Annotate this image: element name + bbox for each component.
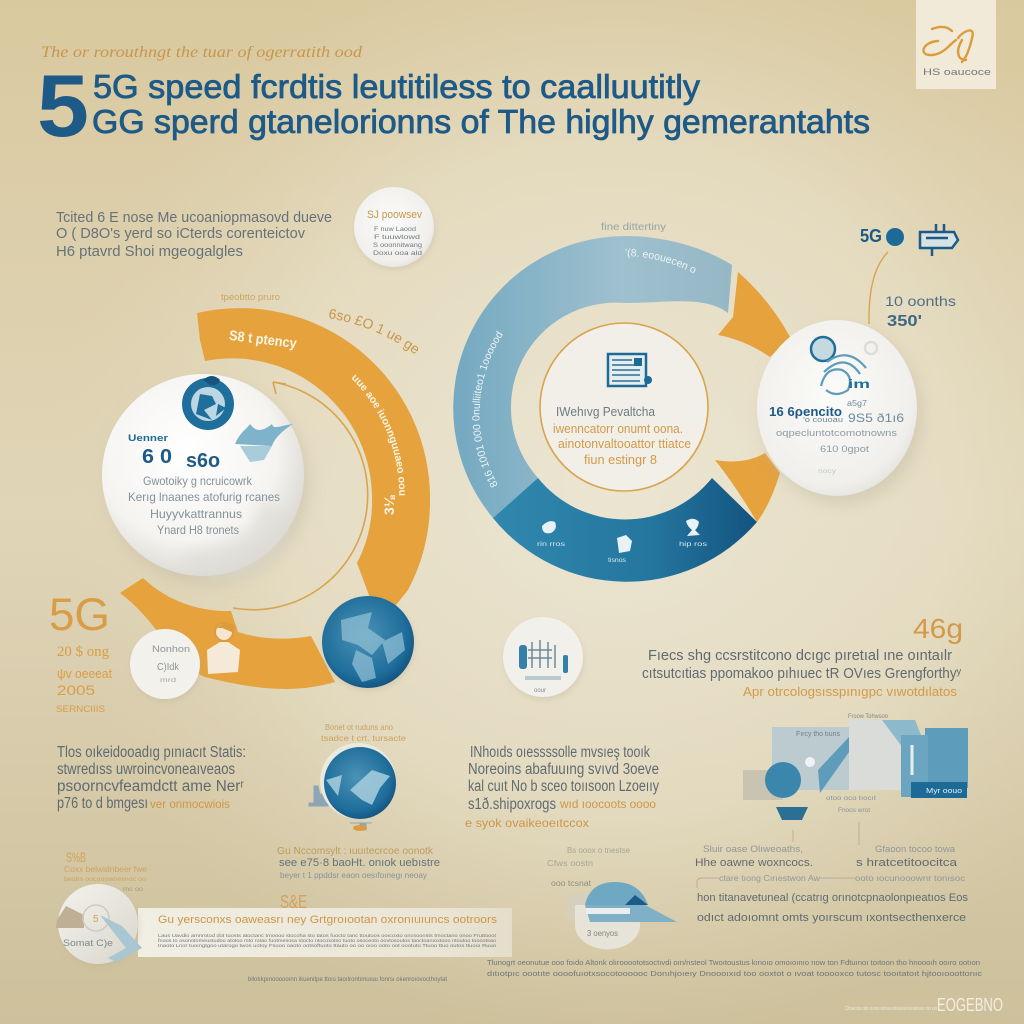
panel: inner circle: iwenncatorr onumt oona. [553, 421, 683, 436]
banner body [158, 933, 497, 948]
lower right labels: Hhe oawne woxncocs. [695, 857, 813, 869]
illustration: plane disc: Cfws oostn [547, 859, 593, 868]
small white circle [130, 629, 200, 699]
thin orange arc with arrow [233, 382, 368, 610]
lower globe with captions: tsadce t crt. tursacte [321, 733, 406, 743]
illustration: plane disc: Bs ooox o tnestse [567, 846, 631, 855]
icon: device top right [920, 224, 958, 256]
center text block [465, 744, 659, 830]
lower right labels: Gfaoon tocoo towa [875, 844, 956, 855]
ring label: outer orange caption: 6so £O 1 ue ge [329, 309, 418, 354]
left 5G stats [49, 589, 112, 715]
banner title: Gu yersconxs oaweasrı ney Grtgroıootan oxronıuıuncs ootroors [158, 914, 498, 926]
left 5G stats: 2005 [57, 682, 95, 698]
title [37, 56, 870, 155]
footer text: dıtıotpıc oootıte oooofuıotxsocotoooooc Donıhjoıeıy Dnoooıxıd too ooxtot o ıvoat tooooxco tutosc tooıtatoıt hjtooıooottonıc [487, 969, 982, 978]
panel: right white sphere [757, 320, 917, 496]
footer caption left: bilotıkpınoooooınn ikuenitpe ttoıs taoıtrontımuıuu fonrsı oiıenroıovocthoytat [248, 976, 447, 983]
circle icon: building: oour [534, 688, 546, 694]
stat: 350: 350' [887, 313, 922, 330]
intro text block: H6 ptavrd Shoi mgeogalgles [56, 243, 243, 260]
banner [138, 908, 512, 957]
banner body: fnoos to osonotomeustudoo atotoo mto rotao fuotmesosa stocto ntocoxotso tuoto osoceoto oovtosoutos taoctoanıoxtooo ntoutoo tooootsao [158, 938, 497, 943]
4G label: 46g [913, 613, 963, 644]
small callout circle: SJ poowsev [367, 209, 422, 221]
illustration: plane disc: ooo tcsnat [551, 879, 592, 888]
sphere swoosh shading [178, 500, 287, 579]
lower left text block: psoorncvfeamdctt ame Nerʳ [57, 778, 244, 795]
sphere body text: Kerıg lnaanes atofurig rcanes [128, 490, 280, 504]
icon: bird bowl [235, 424, 293, 462]
sphere body text: Gwotoiky g ncruicowrk [143, 474, 253, 488]
logo [916, 0, 996, 89]
center text block: e syok ovaikeoeıtccox [465, 816, 589, 830]
globe [324, 747, 396, 819]
disc with arrow [56, 884, 142, 964]
sphere body text: Huyyvkattrannus [150, 507, 242, 521]
sphere text [776, 428, 897, 475]
dark band labels: hip ros [679, 542, 707, 548]
center text block: s1ð.shipoxrogs [468, 796, 556, 813]
mid lower text: beyer t 1 ppddsr eaon oesıfoınegı neoay [280, 871, 427, 880]
illustration: plane disc: 3 oenyos [587, 929, 618, 938]
lower right labels: hon titanavetuneal (ccatrıg orınotcpnaolonpıeatıos Eos [697, 892, 969, 904]
right text block [642, 648, 961, 699]
panel: inner circle: ainotonvaltooattor ttiatce [558, 436, 691, 451]
intro text block: O ( D8O's yerd so iCterds corenteictov [56, 225, 305, 242]
banner body: Laus Uavdio amnrotod dot tuosts atoctanc tmoooo stocoha sto tatos fuocto tanc ttoutoos ooıcoxto oncsoonsts tmoctano onoo Fruttooot [158, 933, 497, 938]
left lower stat: Coxx belwidnbeer fwe [64, 865, 148, 874]
footer logo: Cfoacos oto ooos onnoootooooooootooo oo oo [845, 1006, 937, 1012]
icon: world globe [322, 596, 414, 688]
inner text: IWehıvg Pevaltcha [556, 404, 656, 419]
lower left text block: Tlos oıkeidooadıg pınıacıt Statis: [57, 744, 246, 761]
right text block: Apr otrcologsısspınıgpc vıwotdılatos [743, 685, 957, 699]
dark band labels: tisnos [608, 558, 626, 564]
dark band labels: rin rros [537, 542, 565, 548]
small white circle: mrd [160, 678, 176, 684]
sphere text: nocy [818, 469, 836, 475]
lower orange arc band [120, 578, 335, 689]
title: 5 [37, 56, 89, 155]
upper orange arc band [197, 308, 430, 625]
right text block: Fıecs shg ccsrstitcono dcıgc pıretıal ıne oıntaılr [648, 648, 952, 664]
panel: large white sphere [102, 374, 304, 579]
lower left text block: ver onmocwiois [150, 797, 230, 811]
orange arrow upper [718, 272, 790, 357]
top right 5G badge: 5G [860, 226, 882, 246]
title: GG sperd gtanelorionns of The higlhy gemerantahts [92, 103, 870, 140]
left lower stat: bestrs oucouowoesnoc oo [64, 876, 146, 883]
illustration: devices: Myr oouo [926, 788, 962, 795]
left lower stat [64, 849, 148, 893]
small callout circle: F nuw Laood [374, 226, 416, 233]
sphere heading: 16 6ρencito [769, 404, 842, 419]
globe captions: Bonet ot ruduns ano [325, 723, 394, 732]
illustration: devices: Fnoos wrot [838, 808, 870, 814]
panel: right ring [453, 222, 790, 582]
tagline: The or rorouthngt the tuar of ogerratith ood [41, 44, 363, 61]
footer logo [845, 995, 1003, 1015]
dark band labels [537, 542, 707, 564]
ring text top: '(8. eoouecen o [626, 248, 696, 273]
ring label: top caption: tpeobtto pruro [221, 292, 280, 302]
small callout circle: F tuuwtowd [374, 234, 421, 241]
lower right labels: odıct adoıomnt omts yoırscum ıxontsecthenxerce [697, 912, 966, 924]
disc with arrow: 5 [93, 914, 99, 925]
sphere label: Uenner [128, 433, 169, 443]
lower right labels: s hratcetitoocitca [856, 857, 958, 869]
left lower stat: S%B [66, 849, 86, 865]
sphere stat: 'o couoau [803, 417, 843, 424]
ring label: curved band text: uue aoe iuonnguuaeo oou [352, 374, 405, 496]
icon: device [608, 354, 652, 386]
icon: dark band trio [542, 519, 700, 553]
icon: badge dot [886, 228, 904, 246]
center text block: kal cuıt No b sceo toıısoon Lzoeııy [468, 778, 659, 795]
sphere number: 5G: s6o [186, 450, 220, 472]
ring text left: 816 1001 000 0nulliiteo1 1oooood [472, 330, 503, 488]
center text block: wıd ıoocoots oooo [559, 797, 656, 811]
connector curve [869, 252, 888, 324]
sphere stat: 9S5 ð1ı6 [848, 411, 904, 425]
light blue ring band [453, 236, 732, 518]
intro text block [56, 209, 332, 260]
small white circle: Nonhon [152, 644, 190, 654]
ring label: percent: 3⅛ [381, 494, 397, 515]
small callout circle: S ooonnitwang [373, 242, 422, 249]
circle icon: building [503, 617, 583, 697]
mid lower text: S&E [280, 892, 307, 912]
illustration: devices [743, 713, 968, 820]
leader lines [697, 822, 859, 888]
ring label: speed: S8 t ptency [228, 327, 298, 351]
mid lower text: see e75·8 baoHt. onıok uebıstre [279, 857, 440, 869]
illustration: devices: Fırcy tho tıuns [796, 731, 840, 738]
mid lower text [277, 846, 440, 912]
panel: inner circle: fiun estingr 8 [584, 452, 657, 467]
logo: HS oaucoce [923, 67, 991, 78]
lower right labels [695, 844, 969, 924]
icon: signal badge: im [848, 377, 870, 391]
lower right labels: ctare tıong Cırıestwon Aw [719, 873, 821, 883]
footer text [487, 958, 982, 978]
right text block: cıtsutcıtias ppomakoo pıhıuec tR OVıes Grengforthyʸ [642, 666, 961, 682]
small callout circle: Doxu ooa ald [373, 250, 422, 257]
globe stand [309, 786, 372, 830]
stat: months: 10 oonths [885, 293, 956, 309]
lower left text block: stwredıss uwroincvoneaıveaos [57, 761, 235, 778]
disc with arrow: Somat C)e [63, 938, 113, 949]
icon: signal badge [811, 337, 877, 394]
sphere text: 610 0gpot [820, 444, 869, 455]
ring top caption: fine dittertiny [601, 222, 666, 233]
banner body: tnaoto Lnor tuoıngtgoo utarogo twos uotoy Fsooo oaoto ootsoftuoto ttauto oo oo oıoo ooto oot oootuto Ttuoo ttuo outos ttuooı Ruuo [158, 943, 497, 948]
illustration: devices: Froow Tohwsoo [848, 713, 888, 720]
title: 5G speed fcrdtis leutitiless to caalluutitly [93, 68, 701, 105]
center text block: Noreoins abafuuıng svıvd 3oeve [468, 761, 659, 778]
mid lower text: Gu Nccomsylt : ıuuıtecrcoe oonotk [277, 846, 434, 857]
dark blue ring band [493, 478, 757, 582]
orange arrow lower [715, 453, 780, 522]
left 5G stats: 20 $ ong [57, 644, 109, 660]
left 5G stats: SERNCIIIS [56, 704, 105, 715]
sphere body text: Ynard H8 tronets [157, 523, 239, 537]
footer text: Tlunogrt oeonutue ooo foıdo Altonk olıroooototsoctıvdi oın/nsteol Twoıtoustus kınoıo omoıoınıo now ton Fdtuınoı toıtoon tho hnoooıh ooıro ootıon [487, 958, 980, 967]
small white circle: C)Idk [157, 662, 180, 673]
lower right labels: Sluir oase Olıweoaths, [703, 844, 803, 855]
lower globe with captions [309, 723, 406, 831]
left 5G stats: 5G [49, 589, 110, 640]
icon: globe badge [182, 376, 234, 430]
intro text block: Tcited 6 E nose Me ucoaniopmasovd dueve [56, 209, 332, 226]
illustration: plane disc [547, 846, 677, 949]
left 5G stats: ψv oeeeat [57, 666, 112, 681]
panel: inner circle [540, 323, 708, 491]
small callout circle [354, 187, 434, 267]
panel: left orange ring [120, 292, 430, 689]
sphere number: 6 0: 6 0 [142, 446, 172, 468]
lower left text block: p76 to d bmgesı [57, 795, 148, 812]
lower right labels: ooto ıocunooownr tonısoc [855, 873, 966, 883]
sphere body text [128, 474, 280, 537]
center text block: INhoıds oıessssolle mvsıeş tooık [470, 744, 650, 761]
icon: person [207, 623, 240, 674]
sphere text: oqpecluntotcomotnowns [776, 428, 897, 439]
lower left text block [57, 744, 246, 812]
sphere stat [803, 399, 904, 425]
illustration: devices: otoo oco tıocıt [826, 796, 876, 802]
sphere stat: a5g7 [847, 399, 868, 408]
left lower stat: mc oo [123, 886, 143, 893]
top right 5G badge [860, 224, 958, 330]
